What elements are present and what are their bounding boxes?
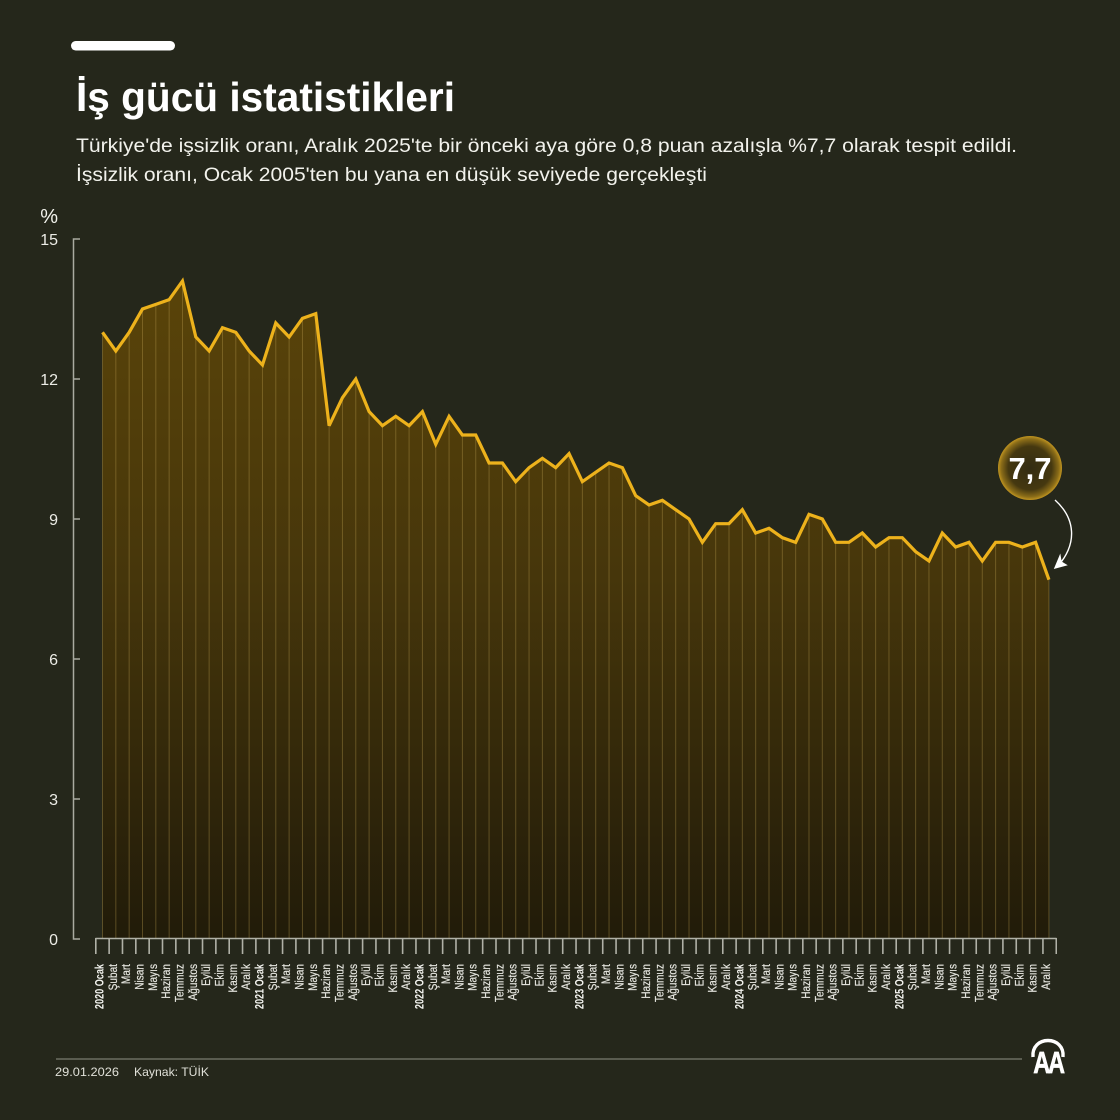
x axis month labels: Aralık [720, 964, 733, 990]
x axis month labels: Kasım [707, 964, 720, 993]
icon: AA logo: AA [1033, 1045, 1065, 1080]
x axis month labels: Temmuz [814, 964, 827, 1002]
x axis month labels: Aralık [1040, 964, 1053, 990]
x axis month labels: 2024 Ocak [733, 964, 747, 1009]
x axis month labels: Mayıs [307, 964, 320, 991]
x axis month labels: 2023 Ocak [573, 964, 587, 1009]
callout: latest value 7,7: 7,7 [1008, 451, 1052, 486]
x axis month labels: Aralık [400, 964, 413, 990]
callout: latest value 7,7 [998, 436, 1062, 500]
x axis month labels: Nisan [454, 964, 467, 990]
x axis month labels: Aralık [240, 964, 253, 990]
x axis month labels: Mart [920, 964, 933, 984]
x axis month labels: 2025 Ocak [893, 964, 907, 1009]
x axis month labels: Ekim [1014, 964, 1027, 986]
x axis month labels: Ağustos [987, 964, 1000, 1000]
x axis month labels: Haziran [320, 964, 333, 999]
x axis month labels: Mart [440, 964, 453, 984]
x axis month labels: Şubat [427, 964, 440, 990]
x axis month labels: Şubat [107, 964, 120, 990]
x axis month labels: Aralık [880, 964, 893, 990]
x axis month labels: Şubat [267, 964, 280, 990]
y axis: 3 [49, 792, 58, 809]
x axis month labels: Temmuz [974, 964, 987, 1002]
y axis: 15 [40, 232, 58, 249]
x axis month labels: Haziran [160, 964, 173, 999]
x axis month labels: 2020 Ocak [93, 964, 107, 1009]
y axis: 0 [49, 932, 58, 949]
x axis month labels: Mayıs [147, 964, 160, 991]
area under the line [102, 281, 1049, 939]
y axis: 6 [49, 652, 58, 669]
arrow: callout to last data point [1055, 500, 1072, 568]
y axis [40, 232, 80, 949]
x axis ticks [95, 938, 1057, 946]
x axis month labels: Eylül [840, 964, 853, 986]
title: İş gücü istatistikleri [76, 74, 455, 120]
x axis month labels: Ekim [694, 964, 707, 986]
x axis month labels: Ekim [534, 964, 547, 986]
subtitle: Türkiye'de işsizlik oranı, Aralık 2025'te bir önceki aya göre 0,8 puan azalışla %7,7 olarak tespit edildi. [76, 136, 1017, 157]
top accent bar [71, 41, 175, 50]
x axis month labels: Eylül [520, 964, 533, 986]
x axis month labels: Şubat [587, 964, 600, 990]
x axis month labels: Temmuz [494, 964, 507, 1002]
x axis month labels: Haziran [800, 964, 813, 999]
x axis month labels: Nisan [934, 964, 947, 990]
x axis month labels: Mayıs [947, 964, 960, 991]
x axis month labels: Eylül [360, 964, 373, 986]
x axis month labels: Nisan [294, 964, 307, 990]
x axis month labels: Mart [760, 964, 773, 984]
x axis month labels: Ekim [214, 964, 227, 986]
x axis month labels: Eylül [200, 964, 213, 986]
x axis month labels: Şubat [907, 964, 920, 990]
x axis month labels: Ağustos [347, 964, 360, 1000]
footer divider [56, 1058, 1022, 1060]
data line [102, 281, 1049, 580]
x axis month labels: 2022 Ocak [413, 964, 427, 1009]
x axis month labels: Nisan [614, 964, 627, 990]
x axis month labels: Mart [280, 964, 293, 984]
drop lines [102, 281, 1049, 939]
x axis month labels: Ağustos [827, 964, 840, 1000]
x axis month labels: Ağustos [507, 964, 520, 1000]
x axis month labels: Nisan [134, 964, 147, 990]
footer date and source [55, 1065, 209, 1079]
x axis month labels: Temmuz [174, 964, 187, 1002]
x axis month labels: Mayıs [627, 964, 640, 991]
x axis month labels: 2021 Ocak [253, 964, 267, 1009]
subtitle: İşsizlik oranı, Ocak 2005'ten bu yana en düşük seviyede gerçekleşti [76, 165, 707, 186]
x axis month labels: Kasım [867, 964, 880, 993]
x axis month labels: Şubat [747, 964, 760, 990]
y axis: 9 [49, 512, 58, 529]
x axis month labels: Kasım [227, 964, 240, 993]
x axis month labels: Ağustos [667, 964, 680, 1000]
x axis month labels: Ekim [854, 964, 867, 986]
x axis month labels: Nisan [774, 964, 787, 990]
x axis month labels: Kasım [387, 964, 400, 993]
y axis: 12 [40, 372, 58, 389]
x axis month labels: Haziran [480, 964, 493, 999]
x axis month labels: Eylül [1000, 964, 1013, 986]
y axis unit: % [40, 206, 58, 228]
x axis month labels: Kasım [1027, 964, 1040, 993]
subtitle [76, 136, 1017, 186]
footer date and source: 29.01.2026 [55, 1065, 119, 1079]
x axis month labels: Mayıs [467, 964, 480, 991]
x axis month labels: Mart [120, 964, 133, 984]
x axis month labels: Ağustos [187, 964, 200, 1000]
x axis month labels: Mart [600, 964, 613, 984]
x axis month labels: Mayıs [787, 964, 800, 991]
x axis month labels [93, 964, 1053, 1009]
x axis month labels: Eylül [680, 964, 693, 986]
line chart: unemployment rate [102, 281, 1049, 939]
x axis month labels: Aralık [560, 964, 573, 990]
x axis month labels: Temmuz [654, 964, 667, 1002]
footer date and source: Kaynak: TÜİK [134, 1065, 209, 1079]
x axis month labels: Haziran [960, 964, 973, 999]
x axis month labels: Ekim [374, 964, 387, 986]
x axis month labels: Temmuz [334, 964, 347, 1002]
x axis month labels: Kasım [547, 964, 560, 993]
x axis month labels: Haziran [640, 964, 653, 999]
